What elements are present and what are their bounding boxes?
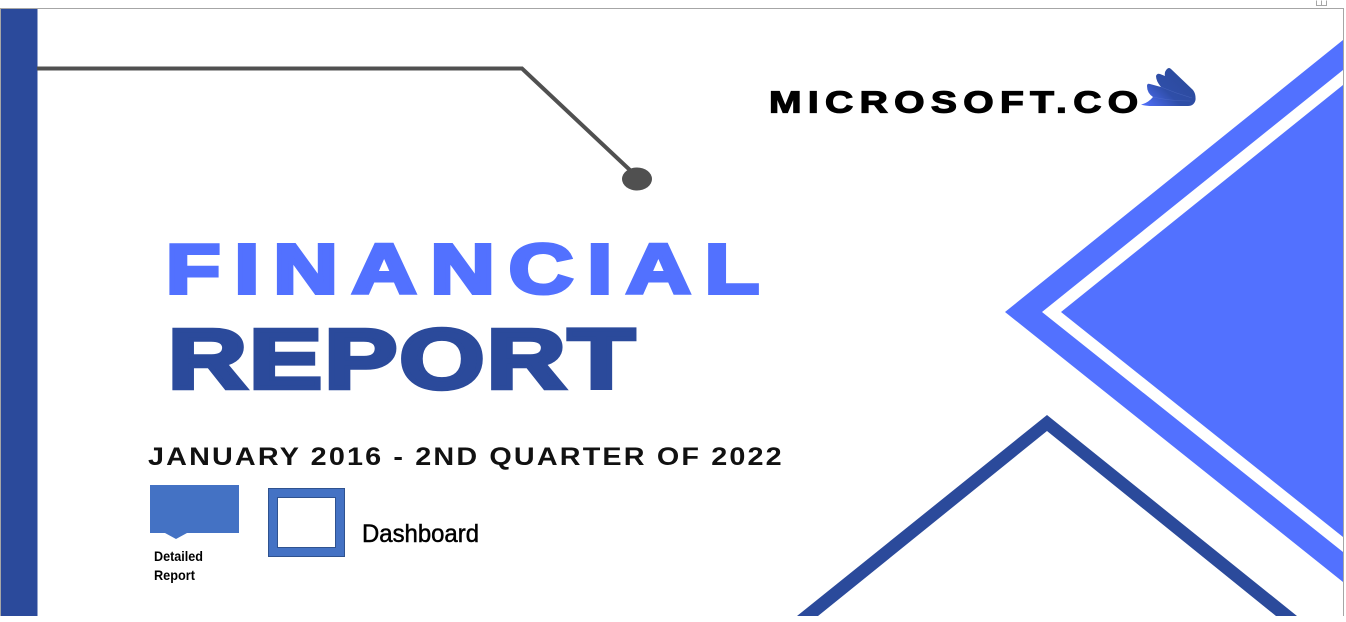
title: financial: FINANCIAL (166, 230, 759, 308)
label: detailed report: Detailed (154, 548, 203, 564)
decorative chevron: dark blue (797, 415, 1297, 616)
label: detailed report: Report (154, 567, 195, 583)
icon: frame (268, 488, 344, 556)
date range: JANUARY 2016 - 2ND QUARTER OF 2022 (148, 443, 782, 471)
button: detailed report (150, 485, 239, 583)
left sidebar (1, 9, 38, 616)
decorative triangle: inner light blue (1061, 85, 1343, 537)
decorative triangle: outer light blue (1005, 40, 1343, 582)
icon: callout (150, 485, 239, 539)
connector line with dot (37, 68, 652, 190)
logo text: MICROSOFT.CO (769, 85, 1138, 120)
title: report: REPORT (168, 312, 635, 406)
label: dashboard: Dashboard (362, 520, 479, 548)
icon: logo wing (1141, 68, 1196, 106)
button: dashboard (268, 488, 479, 556)
